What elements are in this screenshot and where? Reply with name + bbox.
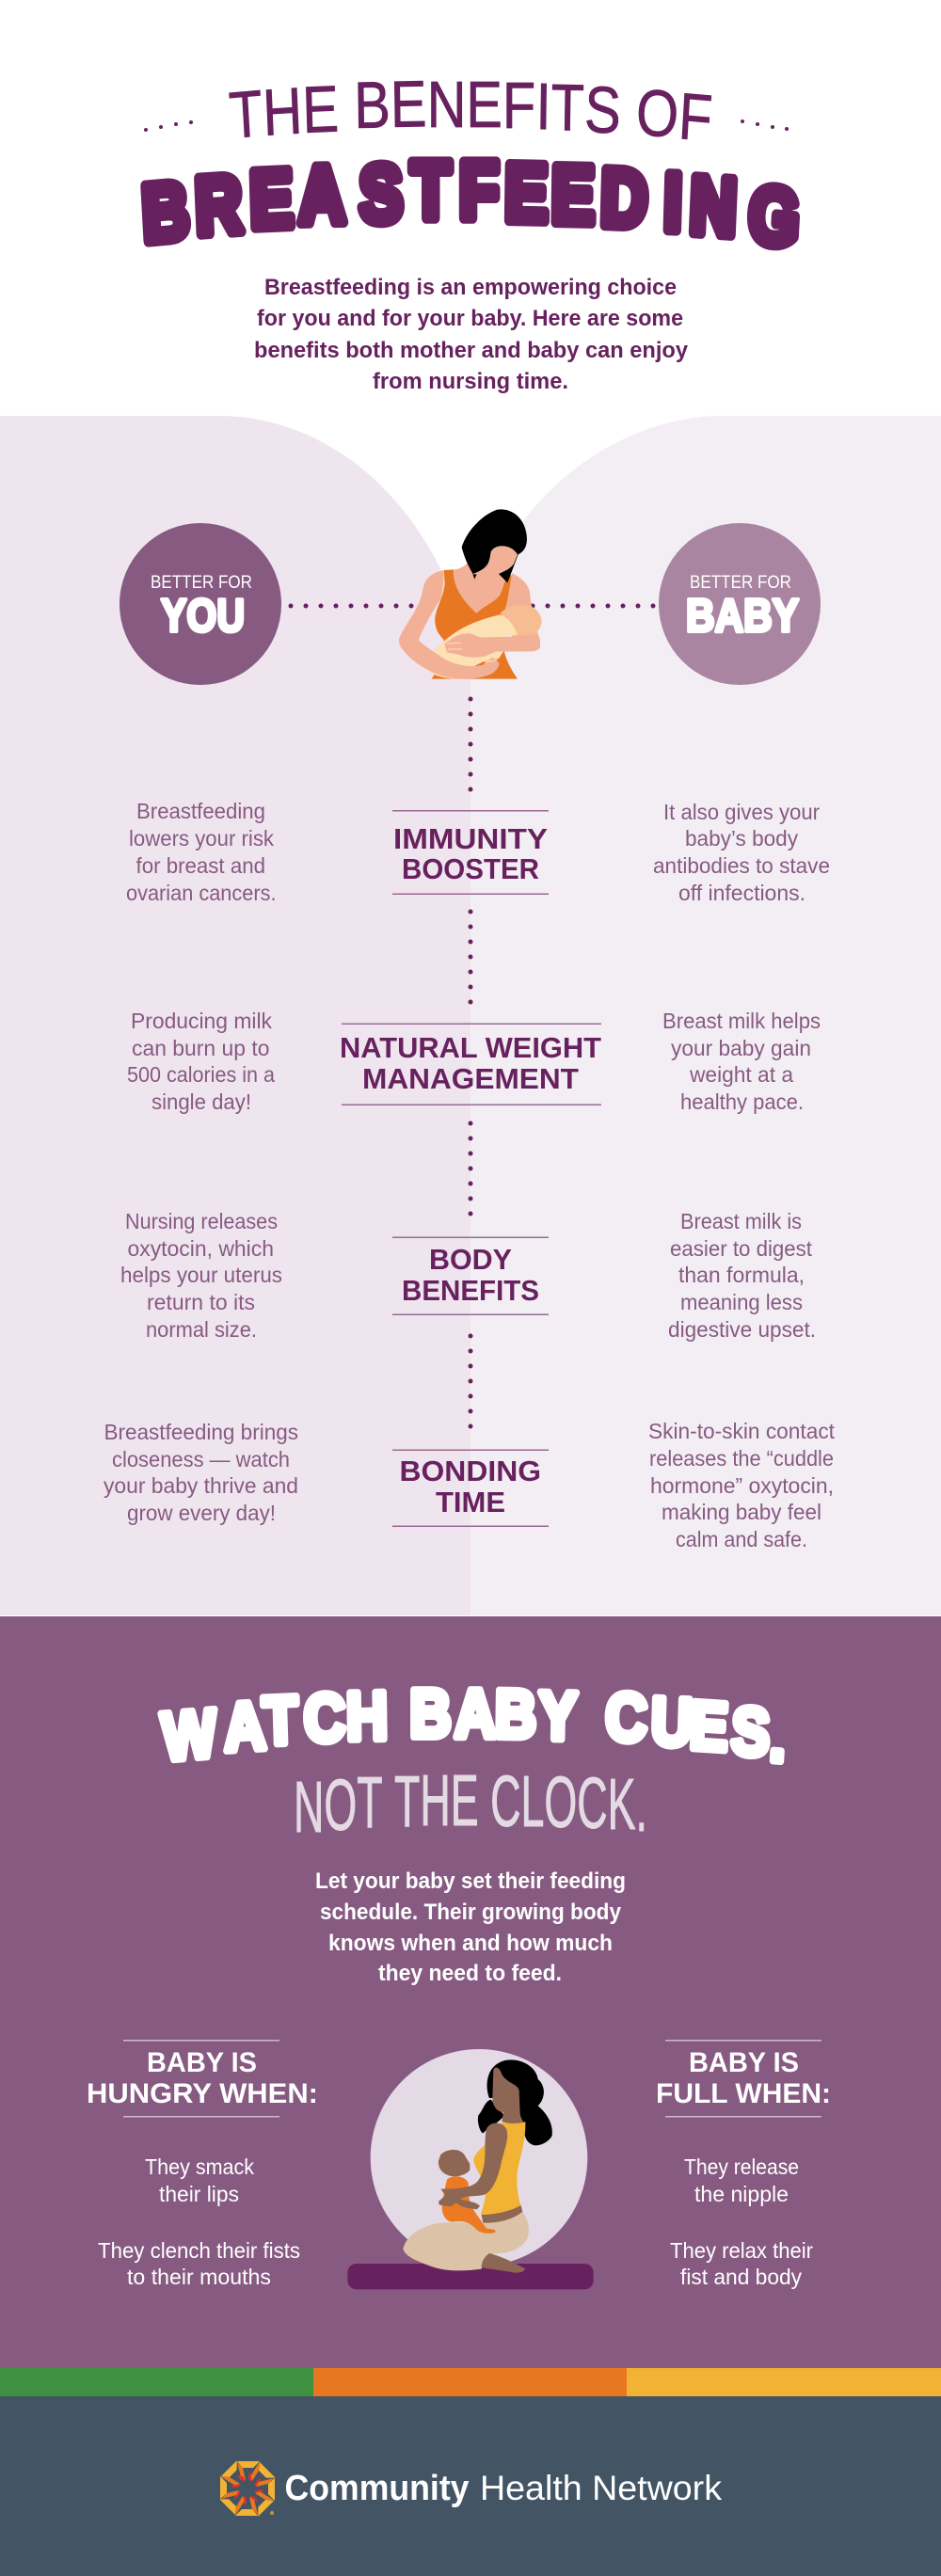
icon: community health network logo (219, 2460, 276, 2517)
heading: baby is hungry when: BABY IS (147, 2047, 257, 2078)
text: hungry cues: their lips (159, 2182, 239, 2206)
text: body for you: return to its (147, 1290, 255, 1314)
center dotted timeline (469, 696, 472, 1428)
panel: better for you background (0, 416, 470, 1615)
text: weight for baby: Breast milk helps (662, 1009, 821, 1033)
paragraph: feeding schedule: knows when and how much (328, 1931, 613, 1956)
intro paragraph: for you and for your baby. Here are some (257, 306, 683, 331)
text: hungry cues (98, 2155, 300, 2289)
text: body for you (120, 1209, 282, 1342)
text: bonding for baby: calm and safe. (676, 1527, 807, 1551)
text: weight for you: single day! (152, 1089, 251, 1114)
badge: better for baby (659, 523, 821, 685)
badge: better for you: YOU (161, 591, 245, 642)
intro paragraph (254, 275, 689, 394)
text: bonding for baby: making baby feel (662, 1500, 821, 1524)
paragraph: feeding schedule: schedule. Their growing body (320, 1900, 622, 1925)
text: bonding for baby: Skin-to-skin contact (648, 1419, 836, 1443)
paragraph: feeding schedule: they need to feed. (378, 1961, 562, 1986)
text: full cues: the nipple (694, 2182, 789, 2206)
text: body for baby: Breast milk is (680, 1209, 802, 1233)
text: immunity for baby: baby’s body (685, 826, 798, 851)
text: body for you: Nursing releases (125, 1209, 278, 1233)
heading: watch baby cues: WATCH BABY CUES. (160, 1677, 789, 1777)
heading: body benefits (392, 1236, 549, 1315)
text: immunity for baby (653, 800, 830, 905)
illustration: seated mother with baby (347, 2049, 594, 2289)
text: bonding for you (104, 1420, 298, 1525)
heading: baby is full when: FULL WHEN: (656, 2078, 831, 2109)
heading: natural weight management: MANAGEMENT (362, 1062, 579, 1095)
text: body for baby: meaning less (680, 1290, 803, 1314)
dotted connector right (531, 604, 655, 608)
text: weight for you (127, 1009, 275, 1114)
heading: body benefits: BENEFITS (402, 1274, 539, 1307)
text: immunity for you: for breast and (136, 853, 265, 878)
color band: yellow (627, 2368, 941, 2396)
panel: watch baby cues (0, 1616, 941, 2368)
text: immunity for you (126, 799, 277, 905)
heading: bonding time (392, 1449, 549, 1527)
footer band (0, 2396, 941, 2576)
text: weight for you: 500 calories in a (127, 1062, 275, 1087)
text: immunity for baby: It also gives your (663, 800, 820, 824)
text: bonding for baby: hormone” oxytocin, (650, 1473, 834, 1498)
decorative title dots right (741, 119, 789, 131)
logo wordmark (284, 2469, 723, 2508)
text: body for baby (668, 1209, 816, 1342)
text: hungry cues: They smack (145, 2155, 254, 2179)
badge: better for you: BETTER FOR (151, 572, 252, 593)
text: weight for baby (662, 1009, 821, 1114)
color band: orange (313, 2368, 627, 2396)
text: full cues: They release (684, 2155, 799, 2179)
text: immunity for you: Breastfeeding (136, 799, 265, 823)
heading: immunity booster: BOOSTER (402, 852, 539, 885)
heading: baby is hungry when: HUNGRY WHEN: (87, 2078, 318, 2109)
color band: green (0, 2368, 313, 2396)
heading: baby is hungry when (87, 2040, 318, 2117)
text: immunity for baby: antibodies to stave (653, 853, 830, 878)
text: body for you: normal size. (146, 1317, 257, 1342)
text: bonding for you: closeness — watch (112, 1447, 290, 1471)
text: immunity for baby: off infections. (678, 881, 805, 905)
text: weight for baby: weight at a (689, 1062, 793, 1087)
text: weight for you: Producing milk (131, 1009, 272, 1033)
decorative title dots left (144, 120, 193, 132)
heading: immunity booster (392, 810, 549, 895)
text: body for you: oxytocin, which (128, 1236, 274, 1261)
logo wordmark: Community (284, 2469, 469, 2508)
paragraph: feeding schedule (315, 1868, 626, 1986)
heading: not the clock: NOT THE CLOCK. (294, 1761, 647, 1848)
text: weight for baby: your baby gain (671, 1036, 811, 1060)
title: the benefits of: THE BENEFITS OF (227, 67, 714, 155)
title: breastfeeding: BREASTFEEDING (139, 146, 802, 263)
intro paragraph: benefits both mother and baby can enjoy (254, 338, 689, 363)
text: body for baby: digestive upset. (668, 1317, 816, 1342)
text: weight for you: can burn up to (132, 1036, 269, 1060)
text: bonding for you: your baby thrive and (104, 1473, 298, 1498)
text: full cues (670, 2155, 813, 2289)
paragraph: feeding schedule: Let your baby set their feeding (315, 1868, 626, 1894)
text: bonding for baby (648, 1419, 836, 1551)
illustration: mother holding baby (399, 509, 541, 679)
badge: better for baby: BABY (686, 591, 799, 642)
heading: natural weight management: NATURAL WEIGHT (340, 1031, 601, 1064)
text: hungry cues: They clench their fists (98, 2238, 300, 2263)
text: bonding for baby: releases the “cuddle (649, 1446, 834, 1471)
logo wordmark: Health Network (480, 2469, 723, 2507)
badge: better for baby: BETTER FOR (690, 572, 791, 593)
intro paragraph: Breastfeeding is an empowering choice (264, 275, 677, 300)
panel: better for baby background (470, 416, 941, 1615)
heading: bonding time: BONDING (399, 1455, 541, 1487)
heading: immunity booster: IMMUNITY (393, 822, 548, 855)
text: bonding for you: grow every day! (127, 1501, 276, 1525)
heading: baby is full when: BABY IS (689, 2047, 799, 2078)
intro paragraph: from nursing time. (373, 369, 568, 394)
text: hungry cues: to their mouths (127, 2265, 271, 2289)
text: body for baby: than formula, (678, 1263, 805, 1287)
heading: baby is full when (656, 2040, 831, 2117)
badge: better for you (120, 523, 281, 685)
heading: bonding time: TIME (436, 1486, 505, 1519)
text: full cues: They relax their (670, 2238, 813, 2263)
heading: natural weight management (340, 1024, 601, 1105)
text: immunity for you: lowers your risk (129, 826, 274, 851)
text: bonding for you: Breastfeeding brings (104, 1420, 298, 1444)
text: body for baby: easier to digest (670, 1236, 813, 1261)
text: body for you: helps your uterus (120, 1263, 282, 1287)
text: full cues: fist and body (680, 2265, 802, 2289)
text: weight for baby: healthy pace. (680, 1089, 804, 1114)
heading: body benefits: BODY (429, 1243, 512, 1276)
dotted connector left (288, 604, 414, 608)
text: immunity for you: ovarian cancers. (126, 881, 277, 905)
